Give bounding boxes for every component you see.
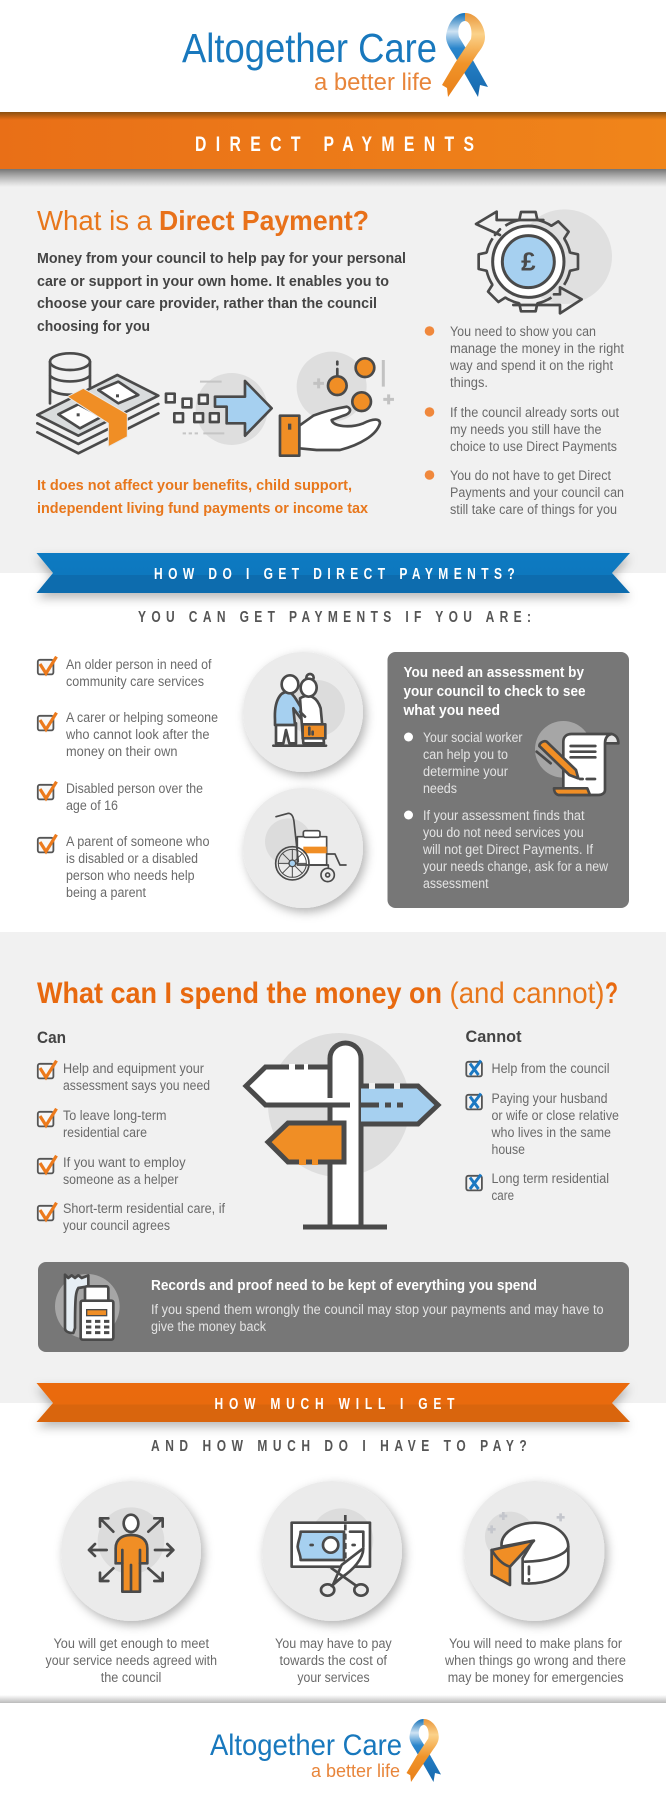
icon: receipt and till [55, 1274, 120, 1340]
logo: footer [210, 1719, 441, 1782]
text: enough to meet needs [46, 1636, 217, 1685]
text block: benefits note [37, 478, 368, 517]
text: plans for emergencies: You will need to make plans for [449, 1636, 622, 1651]
subheading: how much do I have to pay: AND HOW MUCH DO I HAVE TO PAY? [151, 1436, 527, 1454]
column: can: To leave long-term [63, 1108, 166, 1123]
checklist: eligibility: age of 16 [66, 798, 118, 813]
checklist: eligibility: Disabled person over the [66, 781, 203, 796]
logo: header: a better life [314, 69, 432, 96]
text: plans for emergencies: may be money for emergencies [448, 1670, 624, 1685]
column: cannot [466, 1027, 619, 1203]
icon: wheelchair [243, 788, 363, 908]
checklist: eligibility: money on their own [66, 744, 178, 759]
icon: document and pen [535, 721, 618, 795]
panel bullets: needs [423, 781, 457, 796]
column: cannot: Paying your husband [492, 1091, 608, 1106]
ribbon: how do I get direct payments: HOW DO I GET DIRECT PAYMENTS? [154, 564, 515, 582]
column: cannot: house [492, 1142, 525, 1157]
checklist: eligibility: A parent of someone who [66, 834, 210, 849]
panel: assessment [388, 652, 629, 908]
panel bullets: you do not need services you [423, 825, 584, 840]
heading: what is a direct payment [37, 205, 369, 236]
column: cannot: Cannot [466, 1027, 522, 1046]
list: direct payment notes [425, 324, 624, 517]
list: direct payment notes: way and spend it on the right [449, 358, 613, 373]
panel bullets: will not get Direct Payments. If [422, 842, 593, 857]
ribbon: how do I get direct payments [36, 553, 630, 593]
text: plans for emergencies: when things go wrong and there [444, 1653, 626, 1668]
panel text: If you spend them wrongly the council may stop your payments and may have to [151, 1302, 604, 1317]
heading: what can I spend the money on: (and cannot) [450, 977, 604, 1010]
text: pay towards cost [275, 1636, 392, 1685]
text block: definition: care or support in your own home. It enables you to [37, 274, 389, 290]
title banner [0, 112, 666, 169]
subheading: you can get payments: YOU CAN GET PAYMENTS IF YOU ARE: [138, 607, 531, 625]
panel bullets: your needs change, ask for a new [423, 859, 608, 874]
ribbon: how much will I get: HOW MUCH WILL I GET [214, 1394, 455, 1412]
column: can: your council agrees [63, 1218, 170, 1233]
list: direct payment notes: Payments and your council can [450, 485, 624, 500]
panel text: Records and proof need to be kept of everything you spend [151, 1278, 537, 1294]
text block: definition: choose your care provider, rather than the council [37, 296, 377, 312]
panel heading: You need an assessment by [404, 665, 584, 681]
column: can: someone as a helper [63, 1172, 179, 1187]
column: cannot: who lives in the same [491, 1125, 611, 1140]
text: enough to meet needs: the council [101, 1670, 161, 1685]
column: can: If you want to employ [63, 1155, 186, 1170]
ribbon: how much will I get [36, 1383, 630, 1422]
panel heading: what you need [403, 703, 500, 719]
panel bullets: determine your [423, 764, 508, 779]
list: direct payment notes: You do not have to get Direct [450, 468, 611, 483]
column: can: Can [37, 1028, 66, 1047]
column: can: assessment says you need [63, 1078, 210, 1093]
column: can: Help and equipment your [63, 1061, 204, 1076]
list: direct payment notes: manage the money in the right [450, 341, 624, 356]
checklist: eligibility: community care services [66, 674, 204, 689]
column: cannot: Help from the council [492, 1061, 610, 1076]
text: pay towards cost: towards the cost of [280, 1653, 387, 1668]
logo: footer: a better life [311, 1761, 400, 1781]
column: can: Short-term residential care, if [63, 1201, 225, 1216]
title banner: DIRECT PAYMENTS [195, 132, 474, 156]
logo: footer: Altogether Care [210, 1729, 402, 1762]
icon circle: person with arrows [61, 1481, 201, 1621]
list: direct payment notes: You need to show you can [450, 324, 596, 339]
text block: definition: Money from your council to help pay for your personal [37, 251, 406, 267]
checklist: eligibility: A carer or helping someone [66, 710, 218, 725]
panel heading [403, 665, 586, 719]
panel bullets [404, 730, 608, 891]
logo: header [182, 13, 488, 97]
column: cannot: care [492, 1188, 514, 1203]
icon: money to hand [37, 352, 394, 456]
icon circle: pie chart [464, 1481, 604, 1621]
text: enough to meet needs: your service needs agreed with [46, 1653, 217, 1668]
icon: pound gear: £ [521, 247, 536, 277]
list: direct payment notes: still take care of things for you [450, 502, 617, 517]
panel bullets: If your assessment finds that [423, 808, 585, 823]
checklist: eligibility: An older person in need of [66, 657, 212, 672]
checklist: eligibility: being a parent [66, 885, 146, 900]
checklist: eligibility: is disabled or a disabled [66, 851, 198, 866]
icon circle: money and scissors [262, 1481, 402, 1621]
heading: what can I spend the money on: ? [605, 977, 618, 1010]
text block: definition [37, 251, 406, 335]
text: plans for emergencies [444, 1636, 626, 1685]
panel text [151, 1278, 604, 1334]
column: can: residential care [63, 1125, 147, 1140]
panel bullets: assessment [423, 876, 489, 891]
icon: elderly couple [243, 652, 363, 772]
list: direct payment notes: my needs you still have the [450, 422, 602, 437]
text: pay towards cost: your services [297, 1670, 370, 1685]
list: direct payment notes: choice to use Direct Payments [450, 439, 617, 454]
icon: pound gear [476, 209, 612, 313]
column: can [37, 1028, 225, 1233]
panel bullets: can help you to [423, 747, 508, 762]
column: cannot: or wife or close relative [492, 1108, 619, 1123]
logo: header: Altogether Care [182, 25, 437, 71]
column: cannot: Long term residential [492, 1171, 609, 1186]
text: enough to meet needs: You will get enough to meet [54, 1636, 209, 1651]
checklist: eligibility: person who needs help [66, 868, 194, 883]
panel text: give the money back [151, 1319, 266, 1334]
heading: what is a direct payment: What is a [37, 205, 152, 236]
checklist: eligibility: who cannot look after the [65, 727, 210, 742]
text: pay towards cost: You may have to pay [275, 1636, 392, 1651]
heading: what can I spend the money on: What can I spend the money on [37, 977, 442, 1010]
panel bullets: Your social worker [423, 730, 523, 745]
list: direct payment notes: If the council already sorts out [450, 405, 619, 420]
panel heading: your council to check to see [404, 684, 586, 700]
text block: benefits note: It does not affect your benefits, child support, [37, 478, 352, 494]
list: direct payment notes: things. [450, 375, 488, 390]
checklist: eligibility [38, 657, 218, 900]
heading: what is a direct payment: Direct Payment? [159, 205, 369, 236]
icon: signpost [246, 1033, 439, 1227]
panel: records [38, 1262, 629, 1352]
text block: benefits note: independent living fund payments or income tax [37, 501, 368, 517]
text block: definition: choosing for you [37, 319, 150, 335]
